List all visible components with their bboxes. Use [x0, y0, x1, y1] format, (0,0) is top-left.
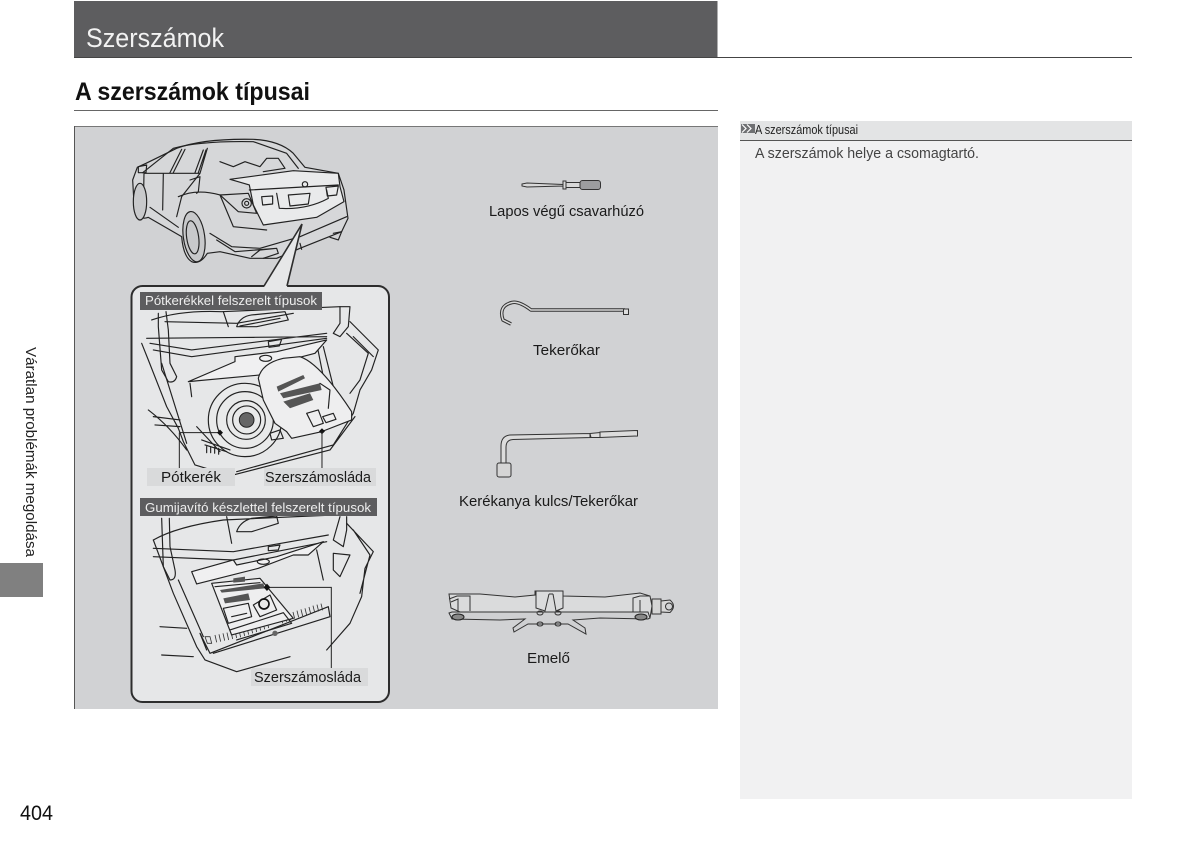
title banner [74, 1, 718, 57]
tool: wheel nut wrench: Kerékanya kulcs/Tekerőkar [459, 493, 638, 510]
panel: sidebar note: A szerszámok helye a csomagtartó. [755, 146, 979, 162]
page number: 404 [20, 802, 53, 825]
label: spare wheel [147, 468, 235, 486]
tool: scissor jack: Emelő [527, 650, 570, 667]
side tab [0, 563, 43, 597]
panel: trunk callouts [132, 224, 389, 702]
trunk illustration: spare tyre [142, 307, 378, 477]
icon: car rear view [133, 139, 348, 263]
title banner: Szerszámok [86, 23, 224, 53]
label: spare wheel: Pótkerék [161, 469, 221, 486]
panel: sidebar note [740, 121, 1132, 799]
label: tool box: Szerszámosláda [265, 469, 372, 486]
panel: sidebar note: A szerszámok típusai [755, 122, 858, 137]
label tag: repair kit models: Gumijavító készlettel felszerelt típusok [145, 500, 372, 515]
tool: screwdriver [489, 180, 644, 220]
tool: wrench handle [502, 302, 628, 359]
tool: wheel nut wrench [459, 430, 638, 510]
label tag: spare tyre models: Pótkerékkel felszerelt típusok [145, 293, 318, 308]
tool: scissor jack [449, 591, 674, 667]
trunk illustration: repair kit [153, 515, 373, 672]
tool: wrench handle: Tekerőkar [533, 342, 600, 359]
icon: double chevron [741, 124, 755, 133]
callout pointer [264, 224, 302, 287]
heading: A szerszámok típusai [75, 78, 310, 106]
side section label: Váratlan problémák megoldása [22, 347, 38, 558]
label: tool box: Szerszámosláda [254, 669, 362, 686]
panel: tools illustration [74, 126, 718, 709]
tool: screwdriver: Lapos végű csavarhúzó [489, 203, 644, 220]
